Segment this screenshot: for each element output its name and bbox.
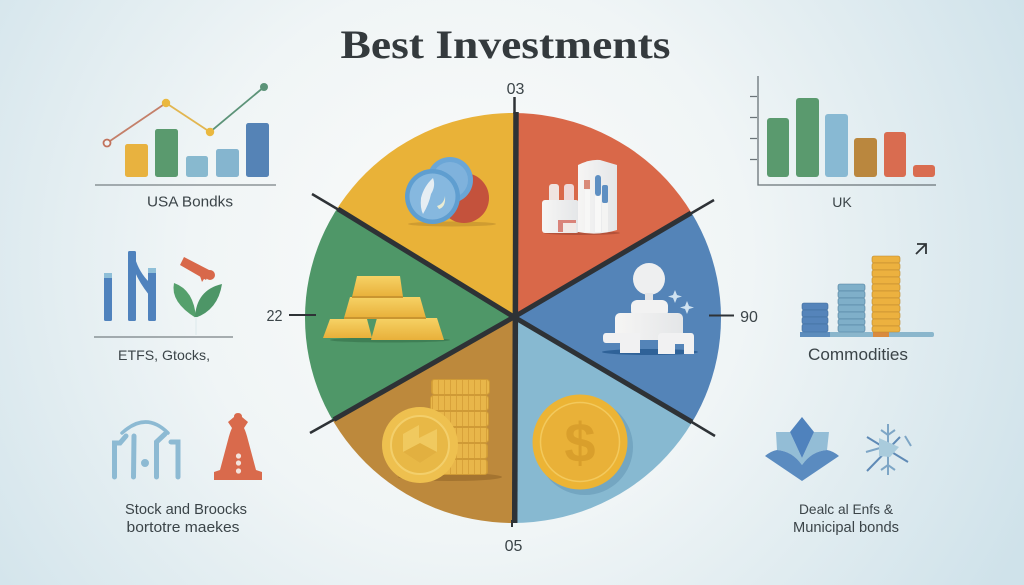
label: bortotre maekes [126,519,240,536]
label [793,501,899,536]
number: 05: 05 [505,538,522,555]
icon: red bell [214,413,262,480]
number: 90 with tick [709,309,758,326]
icon: dollar coin: $ [564,411,596,474]
icon: white buildings [542,160,620,235]
icon: dollar coin [532,394,633,495]
bar and line chart [95,83,276,185]
icon: gold coin stack [382,380,502,483]
number: 90 with tick: 90 [740,309,758,326]
icon: arrow [916,244,926,254]
label: Commodities [808,345,908,364]
icon: white pedestal with sparkles [602,263,698,355]
number: 22 with tick: 22 [266,308,282,325]
spokes [310,97,715,527]
panel: commodities [800,244,934,364]
icon: plant and hammer [173,257,222,335]
panel: municipal bonds [765,417,911,536]
label [125,502,247,536]
icon: blue leaf [765,417,839,481]
label: USA Bondks [147,194,233,210]
bar chart [750,76,936,185]
pie segments [300,100,730,530]
label: Municipal bonds [793,520,899,536]
panel: UK [750,76,936,210]
number: 03: 03 [507,81,524,98]
icon: blue arch [114,422,178,477]
panel: USA Bonds [95,83,276,210]
label: Dealc al Enfs & [799,501,894,517]
pie chart [300,97,730,530]
panel: stock and bonds [114,413,262,536]
label: ETFS, Gtocks, [118,347,210,363]
icon: snowflake [866,424,911,475]
label: Stock and Broocks [125,502,247,518]
icon: blue bars [104,251,156,321]
title: Best Investments [340,22,670,67]
label: UK [832,194,852,210]
number: 22 with tick [266,308,316,325]
icon: blue and red coins [405,157,496,226]
icon: coin stacks [800,256,934,337]
icon: gold bars [323,276,450,342]
panel: ETFs and stocks [94,251,233,363]
